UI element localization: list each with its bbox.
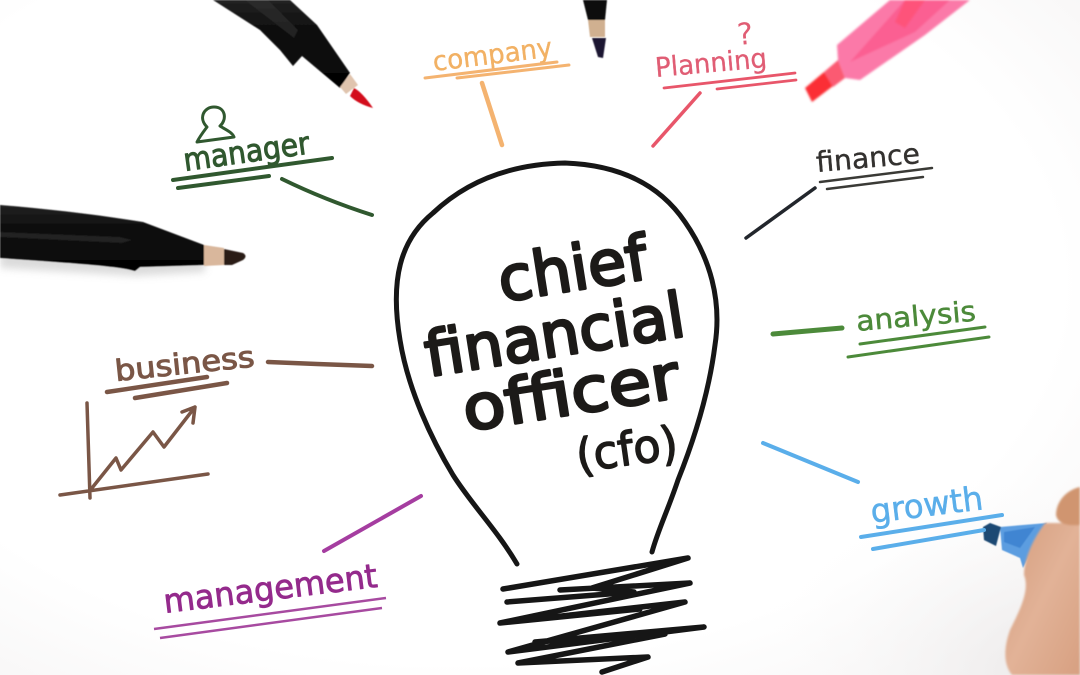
- label: business with chart: business: [113, 340, 256, 388]
- title text in bulb: [420, 221, 690, 483]
- line chart sketch: [60, 403, 208, 498]
- label: management: [154, 496, 421, 638]
- label: planning: ?: [736, 17, 755, 53]
- label: analysis: [773, 295, 989, 357]
- label: growth: growth: [868, 478, 985, 531]
- label: company: company: [431, 33, 554, 78]
- label: manager: [173, 107, 372, 215]
- label: analysis: analysis: [855, 295, 977, 338]
- label: manager: manager: [181, 126, 312, 179]
- icon: black marker left: [0, 205, 246, 276]
- title text in bulb: officer: [457, 340, 685, 446]
- icon: navy marker top: [583, 0, 607, 58]
- title text in bulb: financial: [420, 278, 690, 391]
- title text in bulb: (cfo): [573, 415, 681, 483]
- label: finance: finance: [815, 137, 921, 179]
- label: company: [425, 33, 569, 145]
- label: management: management: [161, 556, 379, 621]
- title text in bulb: chief: [493, 221, 655, 317]
- bulb illustration: [396, 163, 717, 672]
- label: finance: [746, 137, 932, 238]
- icon: hand with blue marker: [983, 487, 1080, 675]
- icon: manager person: [197, 107, 234, 142]
- icon: pink highlighter: [805, 0, 970, 102]
- label: business with chart: [60, 340, 372, 498]
- label: planning: Planning: [654, 43, 768, 84]
- icon: red marker top: [213, 0, 373, 108]
- label: planning: [653, 17, 796, 146]
- label: growth: [763, 443, 1002, 549]
